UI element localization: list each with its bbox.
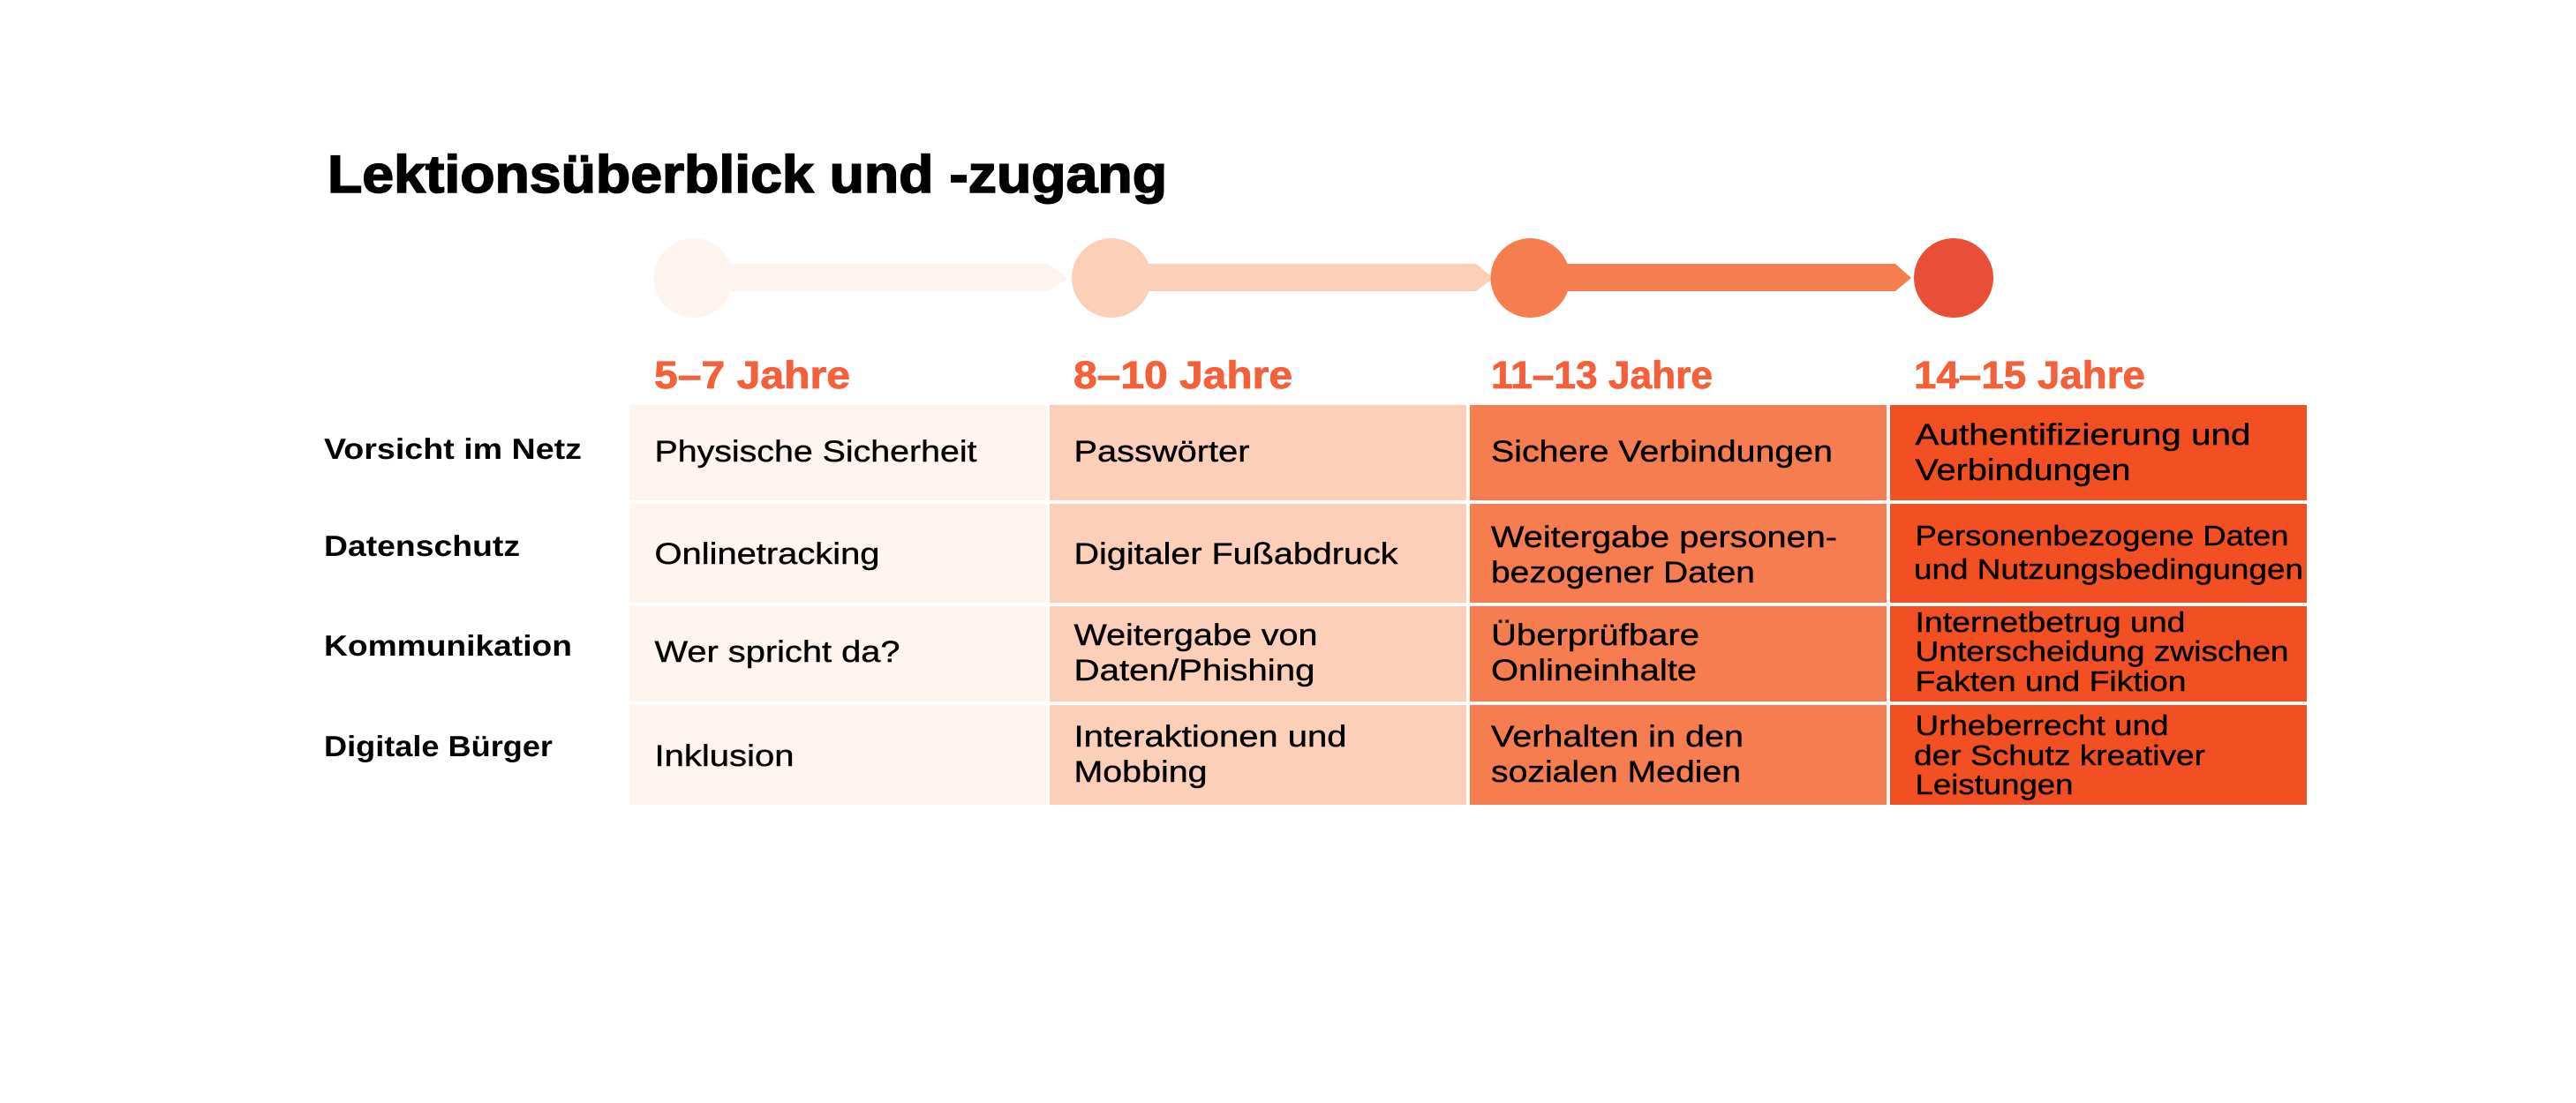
cell: Wer spricht da?: Wer spricht da? bbox=[655, 635, 900, 669]
heading: 8–10 Jahre: 8–10 Jahre bbox=[1073, 354, 1292, 397]
marker: 14–15 Jahre bbox=[1914, 238, 1993, 318]
row label: Datenschutz: Datenschutz bbox=[324, 529, 520, 562]
cell: Überprüfbare Onlineinhalte: Onlineinhalte bbox=[1491, 654, 1697, 687]
cell: Weitergabe von Daten/Phishing: Daten/Phishing bbox=[1073, 654, 1315, 687]
timeline arrows bbox=[653, 238, 1993, 318]
cell: Verhalten in den sozialen Medien: sozialen Medien bbox=[1491, 755, 1741, 789]
cell: Urheberrecht und der Schutz kreativer Leistungen: Leistungen bbox=[1916, 769, 2073, 800]
arrow: 8–10 Jahre to 11–13 Jahre bbox=[1072, 238, 1494, 318]
cell: Sichere Verbindungen: Sichere Verbindungen bbox=[1491, 435, 1833, 469]
cell: Physische Sicherheit bbox=[629, 405, 1046, 500]
cell: Weitergabe personenbezogener Daten bbox=[1470, 504, 1887, 603]
age headings bbox=[654, 354, 2145, 397]
cell: Inklusion: Inklusion bbox=[655, 739, 795, 773]
heading: 14–15 Jahre: 14–15 Jahre bbox=[1914, 354, 2145, 397]
title: Lektionsüberblick und -zugang bbox=[328, 145, 1167, 204]
cell: Passwörter bbox=[1050, 405, 1466, 500]
row label: Vorsicht im Netz: Vorsicht im Netz bbox=[324, 432, 582, 465]
cell: Personenbezogene Daten und Nutzungsbedingungen bbox=[1890, 504, 2307, 603]
row label: Kommunikation: Kommunikation bbox=[324, 629, 572, 662]
cell: Authentifizierung und Verbindungen: Authentifizierung und bbox=[1916, 418, 2251, 452]
cell: Authentifizierung und Verbindungen bbox=[1890, 405, 2307, 500]
cell: Urheberrecht und der Schutz kreativer Leistungen: der Schutz kreativer bbox=[1914, 739, 2205, 771]
heading: 5–7 Jahre: 5–7 Jahre bbox=[654, 354, 850, 397]
cell: Wer spricht da? bbox=[629, 606, 1046, 702]
row label: Digitale Bürger: Digitale Bürger bbox=[324, 730, 553, 762]
cell: Passwörter: Passwörter bbox=[1073, 435, 1250, 469]
cell: Überprüfbare Onlineinhalte bbox=[1470, 606, 1887, 702]
cell: Internetbetrug und Unterscheidung zwischen Fakten und Fiktion bbox=[1890, 606, 2307, 702]
panel: column 5–7 Jahre bbox=[629, 405, 1046, 805]
cell: Verhalten in den sozialen Medien bbox=[1470, 705, 1887, 805]
cell: Internetbetrug und Unterscheidung zwischen Fakten und Fiktion: Unterscheidung zwischen bbox=[1916, 635, 2288, 667]
cell: Weitergabe personenbezogener Daten: bezogener Daten bbox=[1491, 556, 1755, 589]
cell: Interaktionen und Mobbing: Interaktionen und bbox=[1073, 720, 1347, 754]
arrow: 5–7 Jahre to 8–10 Jahre bbox=[653, 238, 1067, 318]
cell: Interaktionen und Mobbing: Mobbing bbox=[1073, 755, 1208, 789]
cell: Urheberrecht und der Schutz kreativer Leistungen: Urheberrecht und bbox=[1916, 709, 2168, 741]
cell: Urheberrecht und der Schutz kreativer Leistungen bbox=[1890, 705, 2307, 805]
cell: Sichere Verbindungen bbox=[1470, 405, 1887, 500]
panel: column 11–13 Jahre bbox=[1470, 405, 1887, 805]
arrow: 11–13 Jahre to 14–15 Jahre bbox=[1490, 238, 1911, 318]
cell: Internetbetrug und Unterscheidung zwischen Fakten und Fiktion: Internetbetrug und bbox=[1916, 606, 2186, 638]
cell: Weitergabe personenbezogener Daten: Weitergabe personen- bbox=[1491, 521, 1837, 554]
cell: Internetbetrug und Unterscheidung zwischen Fakten und Fiktion: Fakten und Fiktion bbox=[1916, 665, 2186, 697]
cell: Personenbezogene Daten und Nutzungsbedingungen: und Nutzungsbedingungen bbox=[1914, 553, 2303, 585]
cell: Onlinetracking bbox=[629, 504, 1046, 603]
panel: column 8–10 Jahre bbox=[1050, 405, 1466, 805]
cell: Inklusion bbox=[629, 705, 1046, 805]
cell: Physische Sicherheit: Physische Sicherheit bbox=[655, 435, 977, 469]
cell: Digitaler Fußabdruck: Digitaler Fußabdruck bbox=[1073, 537, 1399, 571]
cell: Digitaler Fußabdruck bbox=[1050, 504, 1466, 603]
panel: column 14–15 Jahre bbox=[1890, 405, 2307, 805]
cell: Onlinetracking: Onlinetracking bbox=[655, 537, 879, 571]
cell: Verhalten in den sozialen Medien: Verhalten in den bbox=[1491, 720, 1744, 754]
cell: Weitergabe von Daten/Phishing bbox=[1050, 606, 1466, 702]
cell: Interaktionen und Mobbing bbox=[1050, 705, 1466, 805]
cell: Überprüfbare Onlineinhalte: Überprüfbare bbox=[1491, 619, 1699, 652]
cell: Weitergabe von Daten/Phishing: Weitergabe von bbox=[1073, 619, 1317, 652]
cell: Authentifizierung und Verbindungen: Verbindungen bbox=[1916, 454, 2131, 487]
heading: 11–13 Jahre: 11–13 Jahre bbox=[1491, 354, 1713, 397]
cell: Personenbezogene Daten und Nutzungsbedingungen: Personenbezogene Daten bbox=[1916, 520, 2288, 552]
row labels bbox=[324, 432, 582, 762]
